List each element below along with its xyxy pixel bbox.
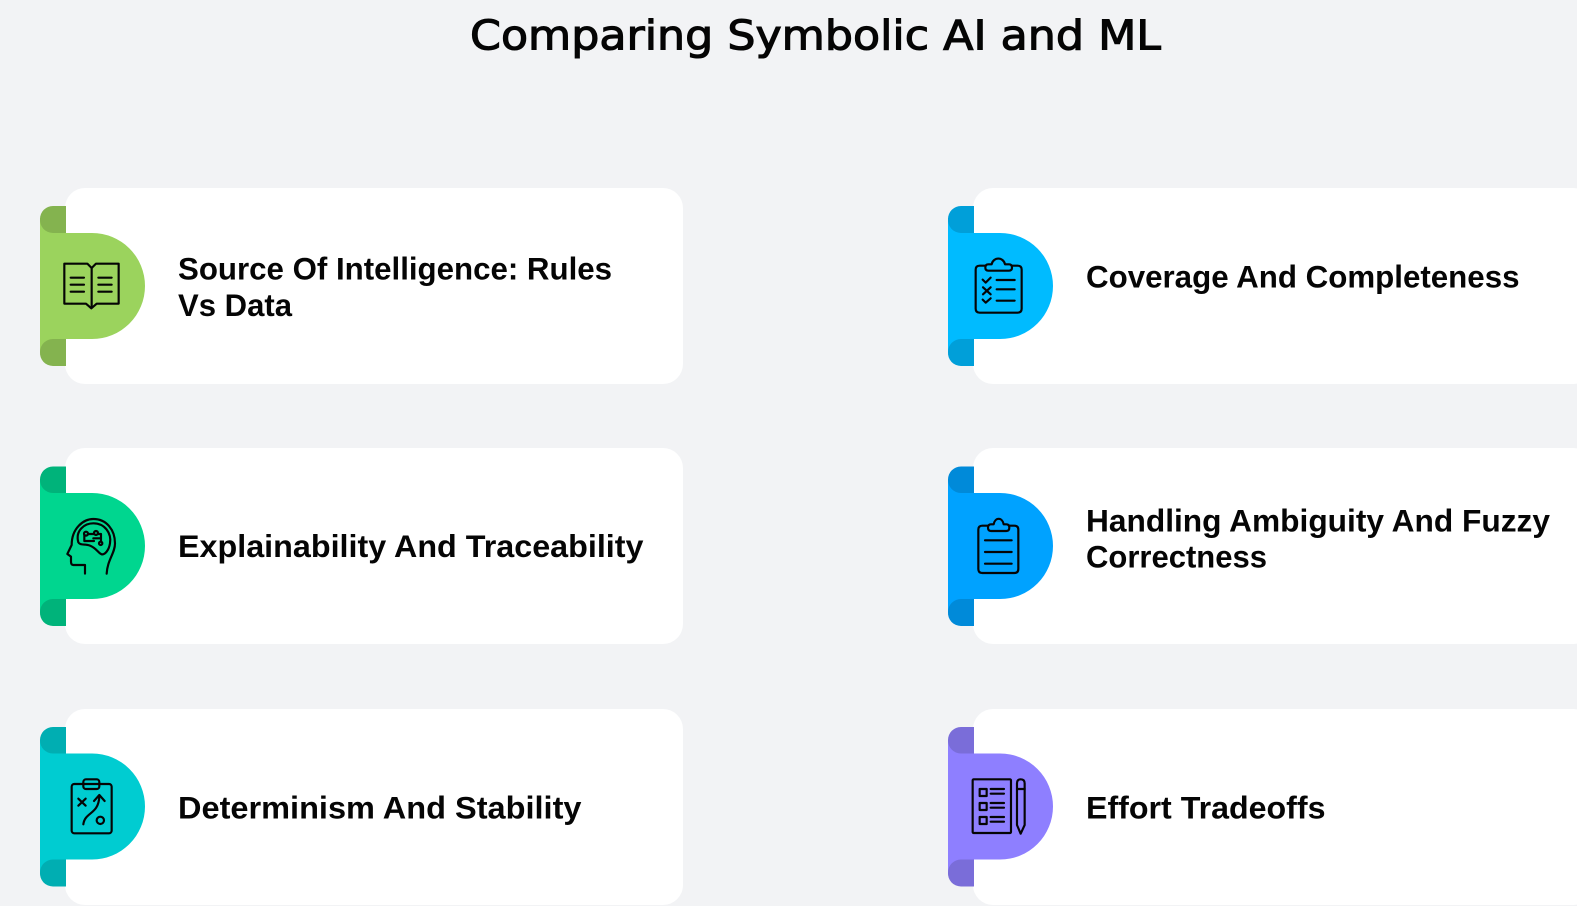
icon: open book <box>64 264 119 308</box>
label: Correctness <box>1086 538 1267 574</box>
label: Source Of Intelligence: Rules <box>178 250 612 286</box>
card background <box>973 709 1577 905</box>
card background <box>973 448 1577 644</box>
azure ribbon badge <box>948 466 1053 626</box>
label: Determinism And Stability <box>178 790 582 826</box>
title: Comparing Symbolic AI and ML <box>470 12 1161 60</box>
green ribbon badge <box>40 206 145 366</box>
label: Vs Data <box>178 287 292 323</box>
label <box>1086 502 1550 574</box>
emerald ribbon badge <box>40 466 145 626</box>
icon: clipboard with play diagram <box>72 779 112 833</box>
panel: source of intelligence <box>40 188 683 384</box>
purple ribbon badge <box>948 727 1053 887</box>
panel: explainability <box>40 448 683 644</box>
card background <box>65 709 683 905</box>
panel: determinism <box>40 709 683 905</box>
teal ribbon badge <box>40 727 145 887</box>
label: Handling Ambiguity And Fuzzy <box>1086 502 1550 538</box>
card background <box>65 448 683 644</box>
panel: effort tradeoffs <box>948 709 1577 905</box>
sky blue ribbon badge <box>948 206 1053 366</box>
panel: ambiguity <box>948 448 1577 644</box>
label: Effort Tradeoffs <box>1086 790 1326 826</box>
card background <box>65 188 683 384</box>
label <box>178 250 612 323</box>
panel: coverage <box>948 188 1577 384</box>
icon: head with brain circuit <box>67 519 115 574</box>
label: Explainability And Traceability <box>178 528 644 564</box>
card background <box>973 188 1577 384</box>
icon: lined clipboard <box>978 519 1018 573</box>
label: Coverage And Completeness <box>1086 258 1520 294</box>
icon: form and pencil <box>973 779 1025 834</box>
icon: checklist clipboard <box>976 259 1022 313</box>
